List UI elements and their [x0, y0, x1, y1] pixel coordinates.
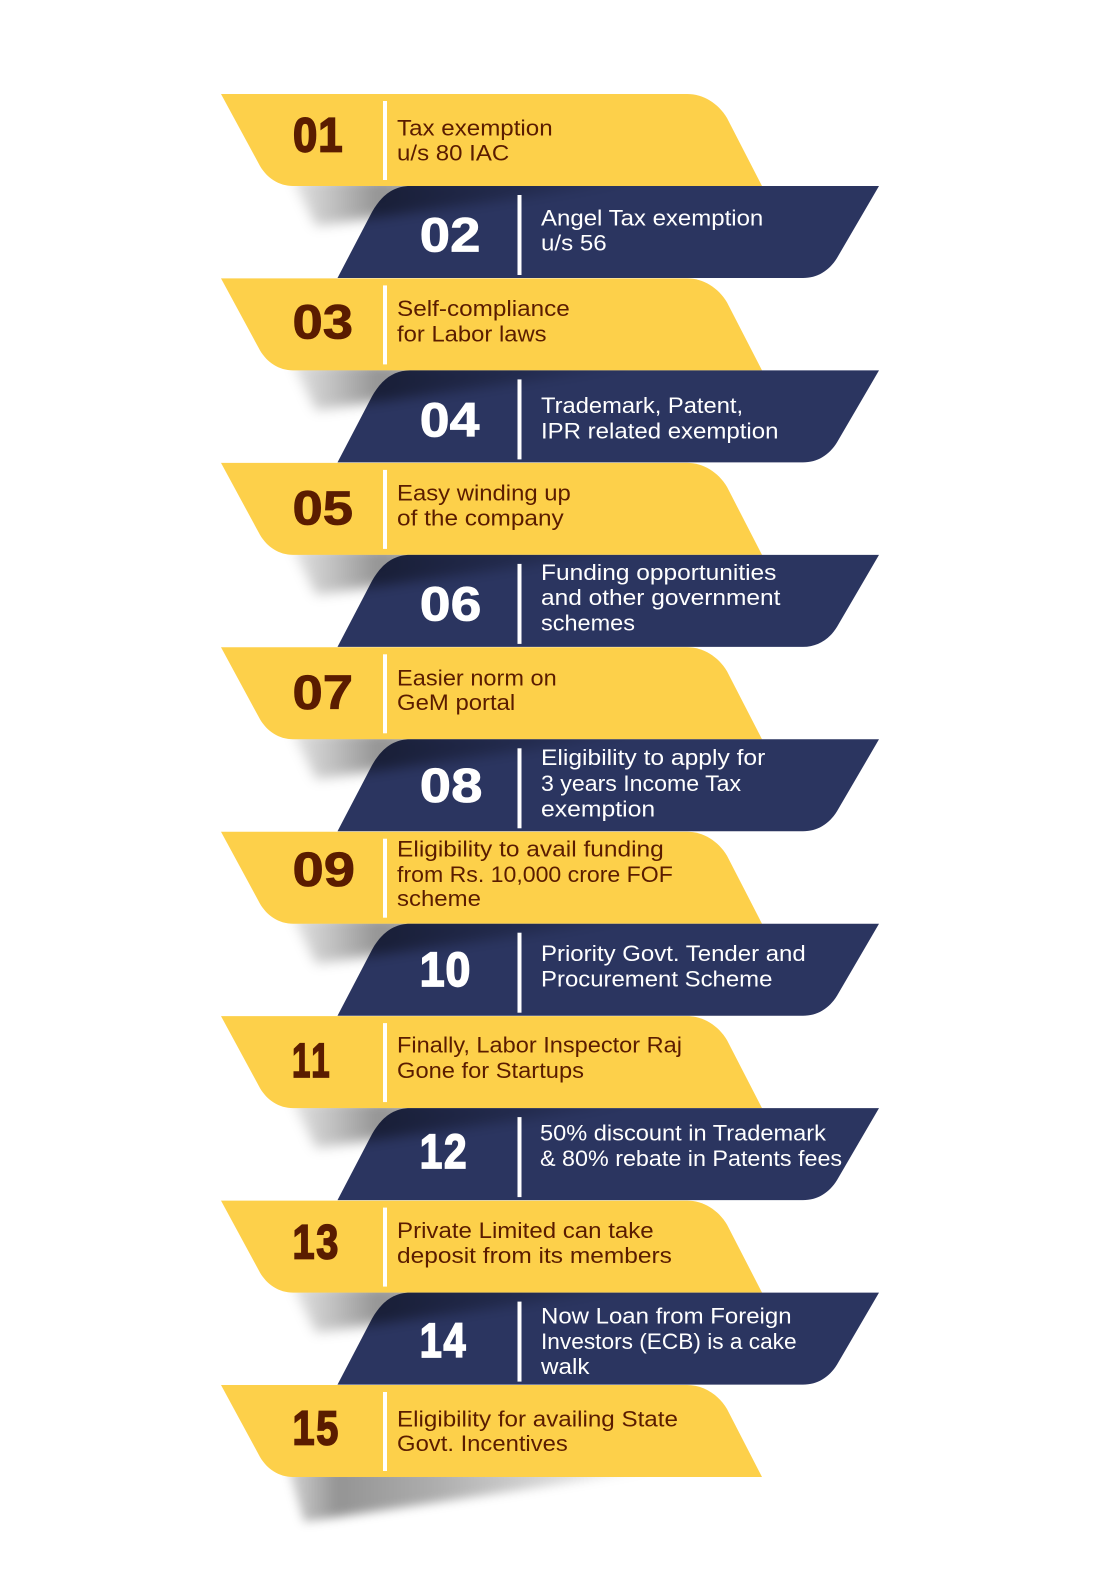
- panel: item 13: [221, 1201, 762, 1293]
- panel: item 07: GeM portal: [397, 690, 515, 715]
- panel: item 09: from Rs. 10,000 crore FOF: [397, 862, 673, 887]
- panel: item 07: 07: [292, 666, 353, 720]
- panel: item 07: [221, 647, 762, 739]
- panel: item 09: [221, 832, 762, 924]
- panel: item 10: 10: [420, 943, 471, 997]
- panel: item 13: deposit from its members: [397, 1243, 672, 1268]
- panel: item 08: exemption: [541, 796, 655, 821]
- panel: item 11: Finally, Labor Inspector Raj: [397, 1033, 682, 1058]
- panel: item 09: scheme: [397, 886, 481, 911]
- panel: item 06: schemes: [541, 610, 635, 635]
- panel: item 13: 13: [292, 1215, 340, 1269]
- panel: item 12: & 80% rebate in Patents fees: [540, 1146, 842, 1171]
- panel: item 04: [292, 362, 879, 462]
- panel: item 12: 50% discount in Trademark: [540, 1121, 826, 1146]
- panel: item 13: Private Limited can take: [397, 1218, 654, 1243]
- panel: item 08: 08: [420, 759, 482, 813]
- panel: item 08: Eligibility to apply for: [541, 745, 765, 770]
- panel: item 02: [292, 178, 879, 278]
- panel: item 02: Angel Tax exemption: [541, 205, 763, 230]
- panel: item 15: Eligibility for availing State: [397, 1407, 678, 1432]
- panel: item 06: 06: [420, 577, 481, 631]
- panel: item 15: [221, 1385, 762, 1477]
- panel: item 01: u/s 80 IAC: [397, 141, 509, 166]
- panel: item 05: of the company: [397, 505, 564, 530]
- panel: item 11: 11: [292, 1034, 332, 1088]
- panel: item 14: 14: [420, 1314, 467, 1368]
- panel: item 03: 03: [292, 295, 353, 349]
- panel: item 10: Procurement Scheme: [541, 966, 772, 991]
- panel: item 03: for Labor laws: [397, 321, 547, 346]
- panel: item 04: Trademark, Patent,: [541, 393, 743, 418]
- panel: item 06: and other government: [541, 585, 780, 610]
- panel: item 11: Gone for Startups: [397, 1058, 584, 1083]
- panel: item 04: IPR related exemption: [541, 418, 778, 443]
- panel: item 14: Investors (ECB) is a cake: [541, 1329, 797, 1354]
- panel: item 05: 05: [292, 481, 353, 535]
- panel: item 01: 01: [293, 109, 344, 163]
- panel: item 12: 12: [420, 1125, 468, 1179]
- panel: item 02: u/s 56: [541, 231, 607, 256]
- panel: item 15: Govt. Incentives: [397, 1431, 568, 1456]
- bottom shadow: [288, 1468, 670, 1522]
- panel: item 11: [221, 1016, 762, 1108]
- panel: item 14: walk: [540, 1354, 590, 1379]
- panel: item 01: Tax exemption: [397, 115, 553, 140]
- panel: item 05: Easy winding up: [397, 481, 571, 506]
- panel: item 07: Easier norm on: [397, 665, 557, 690]
- panel: item 10: Priority Govt. Tender and: [541, 941, 806, 966]
- panel: item 03: [221, 278, 762, 370]
- panel: item 14: Now Loan from Foreign: [541, 1303, 792, 1328]
- panel: item 01: [221, 94, 762, 186]
- panel: item 06: [292, 547, 879, 647]
- panel: item 03: Self-compliance: [397, 296, 570, 321]
- panel: item 04: 04: [420, 393, 479, 447]
- panel: item 02: 02: [420, 209, 480, 263]
- panel: item 08: [292, 731, 879, 831]
- panel: item 10: [292, 916, 879, 1016]
- panel: item 12: [292, 1100, 879, 1200]
- panel: item 06: Funding opportunities: [541, 560, 777, 585]
- panel: item 05: [221, 463, 762, 555]
- panel: item 09: 09: [292, 843, 355, 897]
- panel: item 15: 15: [292, 1402, 340, 1456]
- panel: item 09: Eligibility to avail funding: [397, 837, 664, 862]
- panel: item 08: 3 years Income Tax: [541, 771, 741, 796]
- panel: item 14: [292, 1285, 879, 1385]
